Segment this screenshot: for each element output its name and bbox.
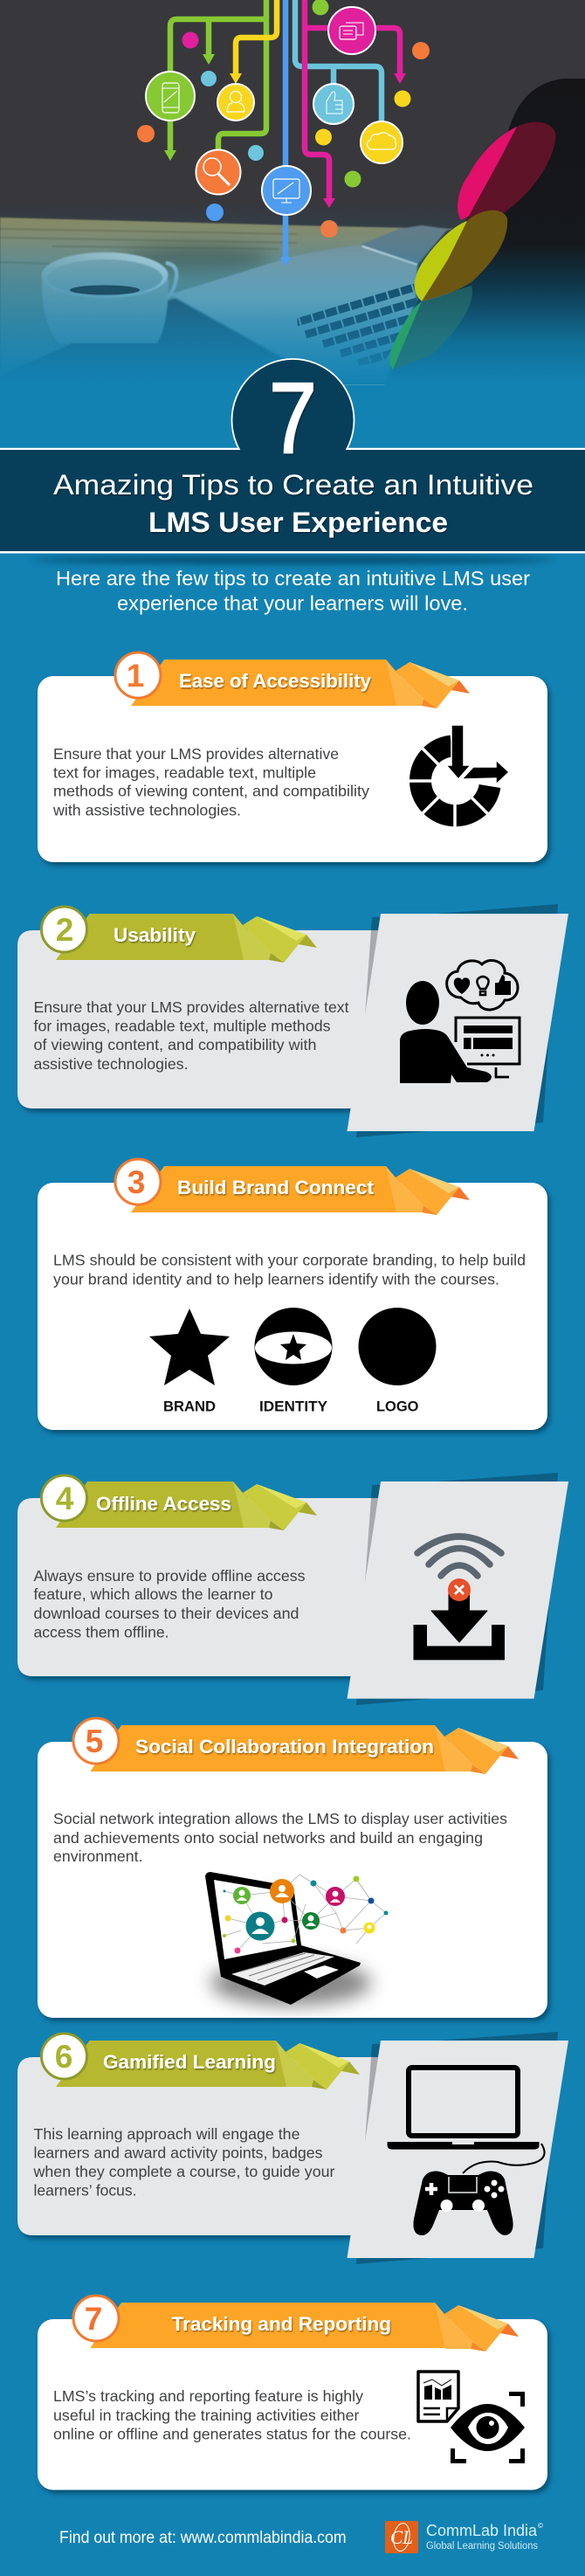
- text: tip 7: LMS’s tracking and reporting feature is highly: [53, 2387, 363, 2405]
- logo: CommLab India: CommLab India: [426, 2522, 538, 2539]
- coloured lines and arrows: [170, 0, 400, 258]
- intro text: Here are the few tips to create an intuitive LMS user: [56, 567, 530, 590]
- label: brand: BRAND: [163, 1399, 216, 1415]
- ribbon 5: [73, 1718, 519, 1774]
- heading line 2: LMS User Experience: [148, 507, 448, 538]
- intro text: [56, 567, 530, 615]
- hero photo: desk, cup and laptop: [0, 0, 585, 385]
- text: tip 2: [33, 998, 349, 1073]
- panel: tip 1: [38, 653, 547, 862]
- logo: CommLab India: Global Learning Solutions: [426, 2541, 538, 2552]
- dots: [137, 0, 430, 238]
- hero network graphic: [137, 0, 430, 266]
- text: tip 2: Ensure that your LMS provides alternative text: [33, 998, 349, 1016]
- ribbon 4: [42, 1475, 317, 1530]
- panel: tip 2: [17, 904, 568, 1137]
- ribbon 2: 2: [56, 912, 73, 948]
- icon: chat bubbles: [328, 7, 375, 54]
- logo: CommLab India: CL: [390, 2526, 413, 2548]
- text: tip 7: useful in tracking the training activities either: [53, 2407, 360, 2424]
- laptop lid edge: [361, 225, 448, 265]
- ribbon 1: Ease of Accessibility: [179, 670, 371, 692]
- text: tip 6: learners and award activity points, badges: [33, 2144, 323, 2161]
- ribbon 6: 6: [55, 2039, 72, 2075]
- text: tip 2: assistive technologies.: [33, 1055, 189, 1073]
- laptop keyboard: [297, 283, 418, 365]
- label: identity: IDENTITY: [259, 1399, 327, 1415]
- text: tip 2: for images, readable text, multiple methods: [33, 1018, 331, 1035]
- text: tip 4: feature, which allows the learner to: [33, 1585, 272, 1603]
- ribbon 3: Build Brand Connect: [177, 1177, 375, 1198]
- icon: brand star: [149, 1309, 230, 1385]
- ribbon 6: [42, 2034, 360, 2089]
- illustration: laptop with social network: [205, 1872, 388, 2006]
- panel: tip 4: [17, 1473, 568, 1705]
- text: tip 5: [53, 1810, 507, 1865]
- icon: monitor: [262, 166, 311, 215]
- icon: laptop and game controller: [388, 2068, 545, 2235]
- logo: CommLab India: ©: [538, 2522, 543, 2530]
- ribbon 3: 3: [127, 1164, 145, 1200]
- ribbon 1: 1: [127, 658, 144, 694]
- ribbon 2: [42, 907, 317, 963]
- panel: tip 5: [38, 1718, 547, 2018]
- text: tip 3: [53, 1251, 526, 1288]
- text: tip 5: environment.: [53, 1847, 143, 1865]
- text: tip 1: text for images, readable text, multiple: [53, 764, 316, 782]
- text: tip 1: with assistive technologies.: [52, 802, 241, 819]
- text: tip 3: LMS should be consistent with your corporate branding, to help build: [53, 1251, 526, 1268]
- ribbon 7: 7: [85, 2301, 102, 2337]
- text: tip 2: of viewing content, and compatibility with: [33, 1036, 316, 1053]
- icon: search: [196, 150, 241, 194]
- icon: identity eye: [255, 1308, 332, 1385]
- icon: cloud: [361, 121, 403, 163]
- text: tip 3: your brand identity and to help learners identify with the courses.: [53, 1271, 499, 1288]
- laptop deck: [170, 245, 417, 384]
- coloured leaves: [389, 122, 556, 369]
- text: tip 5: Social network integration allows the LMS to display user activities: [53, 1810, 507, 1827]
- text: tip 6: [32, 2125, 335, 2200]
- ribbon 2: Usability: [114, 924, 196, 946]
- icon: user: [217, 84, 254, 121]
- ribbon 5: Social Collaboration Integration: [135, 1736, 434, 1758]
- text: tip 6: when they complete a course, to guide your: [32, 2163, 335, 2180]
- coffee cup: [42, 278, 169, 343]
- ribbon 6: Gamified Learning: [103, 2051, 276, 2073]
- big number seven: 7: [269, 363, 317, 474]
- text: tip 1: [52, 745, 369, 819]
- text: tip 4: [33, 1567, 306, 1640]
- text: tip 6: This learning approach will engage the: [33, 2125, 300, 2143]
- panel: tip 6: [17, 2032, 568, 2264]
- text: tip 7: [53, 2387, 411, 2442]
- ribbon 4: 4: [56, 1481, 74, 1516]
- title block: [0, 359, 585, 563]
- ribbon 7: [73, 2296, 519, 2352]
- intro text: experience that your learners will love.: [117, 592, 468, 615]
- text: tip 4: Always ensure to provide offline access: [33, 1567, 306, 1585]
- icon: report and eye: [418, 2372, 525, 2462]
- ribbon 4: Offline Access: [96, 1493, 231, 1515]
- text: tip 5: and achievements onto social networks and build an engaging: [53, 1829, 483, 1847]
- icon: offline download: [414, 1537, 505, 1660]
- label: logo: LOGO: [376, 1399, 419, 1415]
- ribbon 5: 5: [86, 1723, 103, 1759]
- text: tip 1: Ensure that your LMS provides alternative: [53, 745, 339, 763]
- text: tip 6: learners’ focus.: [33, 2182, 136, 2200]
- text: tip 7: online or offline and generates status for the course.: [53, 2425, 411, 2442]
- text: tip 4: download courses to their devices and: [33, 1605, 299, 1622]
- footer link: Find out more at: www.commlabindia.com: [59, 2528, 347, 2547]
- text: tip 4: access them offline.: [33, 1623, 169, 1640]
- panel: tip 3: [38, 1159, 547, 1430]
- icon: logo circle: [358, 1308, 437, 1385]
- logo: CommLab India: [385, 2521, 543, 2553]
- icon: phone: [146, 72, 195, 121]
- hinge highlight: [362, 246, 417, 265]
- text: tip 1: methods of viewing content, and compatibility: [53, 783, 369, 800]
- ribbon 1: [115, 653, 470, 708]
- ribbon 3: [115, 1159, 470, 1215]
- dark plant silhouette: [389, 79, 585, 384]
- icon: user at computer: [400, 960, 520, 1083]
- icon: thumbs up: [313, 84, 354, 124]
- icon: accessibility dial: [403, 725, 509, 832]
- ribbon 7: Tracking and Reporting: [172, 2313, 391, 2335]
- panel: tip 7: [38, 2296, 547, 2490]
- heading line 1: Amazing Tips to Create an Intuitive: [53, 469, 533, 501]
